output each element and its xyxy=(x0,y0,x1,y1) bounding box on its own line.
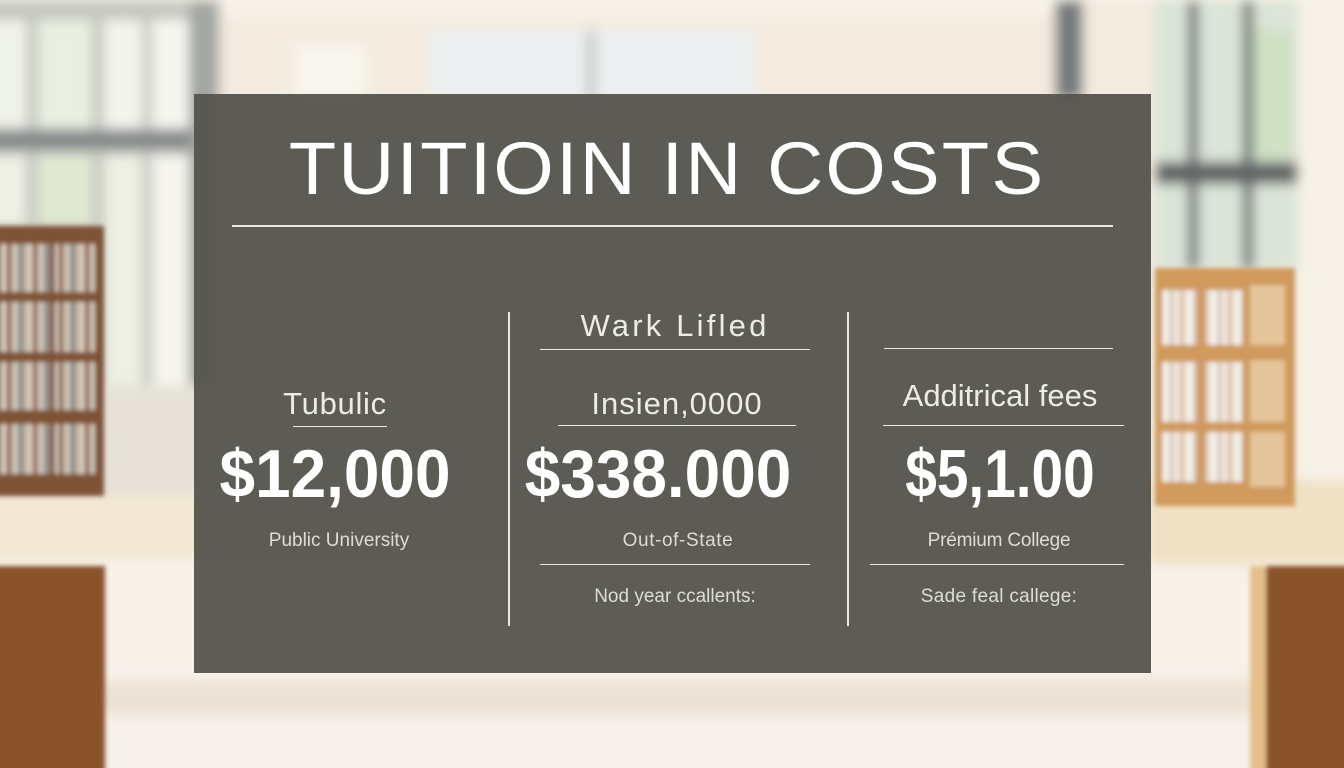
column: out-of-state tuition xyxy=(525,308,810,607)
heading: Wark Lifled: Wark Lifled xyxy=(580,308,770,343)
number: $338.000: $338.000 xyxy=(525,436,791,512)
title: TUITIOIN IN COSTS xyxy=(289,127,1045,210)
panel: tuition costs xyxy=(194,94,1151,673)
note: Sade feal callege: Sade feal callege: xyxy=(921,586,1077,607)
number: $5,1.00: $5,1.00 xyxy=(905,436,1095,512)
heading: Tubulic: Tubulic xyxy=(283,386,387,421)
label: Out-of-State: Out-of-State xyxy=(623,530,733,551)
heading: Additrical fees: Additrical fees xyxy=(903,378,1097,413)
label: Public University: Public University xyxy=(269,530,409,551)
left desk xyxy=(0,566,105,768)
label: Premium College: Prémium College xyxy=(928,530,1070,551)
right desk xyxy=(1266,566,1344,768)
column: additional fees xyxy=(870,348,1124,607)
number: $12,000: $12,000 xyxy=(219,436,451,512)
note: Nod year ccallents: Nod year ccallents: xyxy=(594,586,756,607)
column: public tuition xyxy=(219,386,451,551)
left shelf xyxy=(0,226,104,496)
heading: Insien,0000: Insien,0000 xyxy=(591,386,763,421)
right shelf xyxy=(1155,268,1295,506)
